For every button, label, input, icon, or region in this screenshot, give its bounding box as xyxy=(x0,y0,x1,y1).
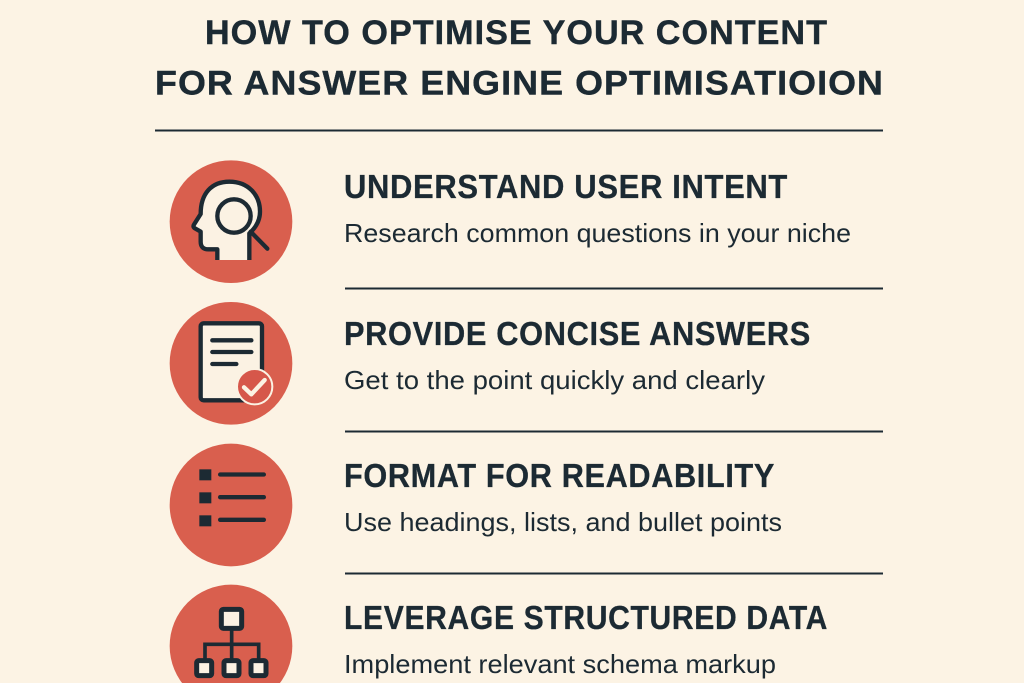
title: FOR ANSWER ENGINE OPTIMISATIOION xyxy=(155,64,884,102)
title xyxy=(155,14,884,102)
item 3 description: Use headings, lists, and bullet points xyxy=(344,507,782,537)
item 3 heading: FORMAT FOR READABILITY xyxy=(344,457,775,494)
icon: head with magnifying glass xyxy=(170,160,292,283)
item 4 description: Implement relevant schema markup xyxy=(344,649,776,679)
icon: bullet list xyxy=(170,444,292,566)
item 1 description: Research common questions in your niche xyxy=(344,218,851,248)
title: HOW TO OPTIMISE YOUR CONTENT xyxy=(205,14,828,52)
item 4 heading: LEVERAGE STRUCTURED DATA xyxy=(344,599,828,636)
item 2 heading: PROVIDE CONCISE ANSWERS xyxy=(344,315,811,352)
item 2 description: Get to the point quickly and clearly xyxy=(344,365,765,395)
icon: document with check badge xyxy=(170,302,292,425)
icon: hierarchy diagram xyxy=(170,585,292,683)
item 1 heading: UNDERSTAND USER INTENT xyxy=(344,168,788,205)
